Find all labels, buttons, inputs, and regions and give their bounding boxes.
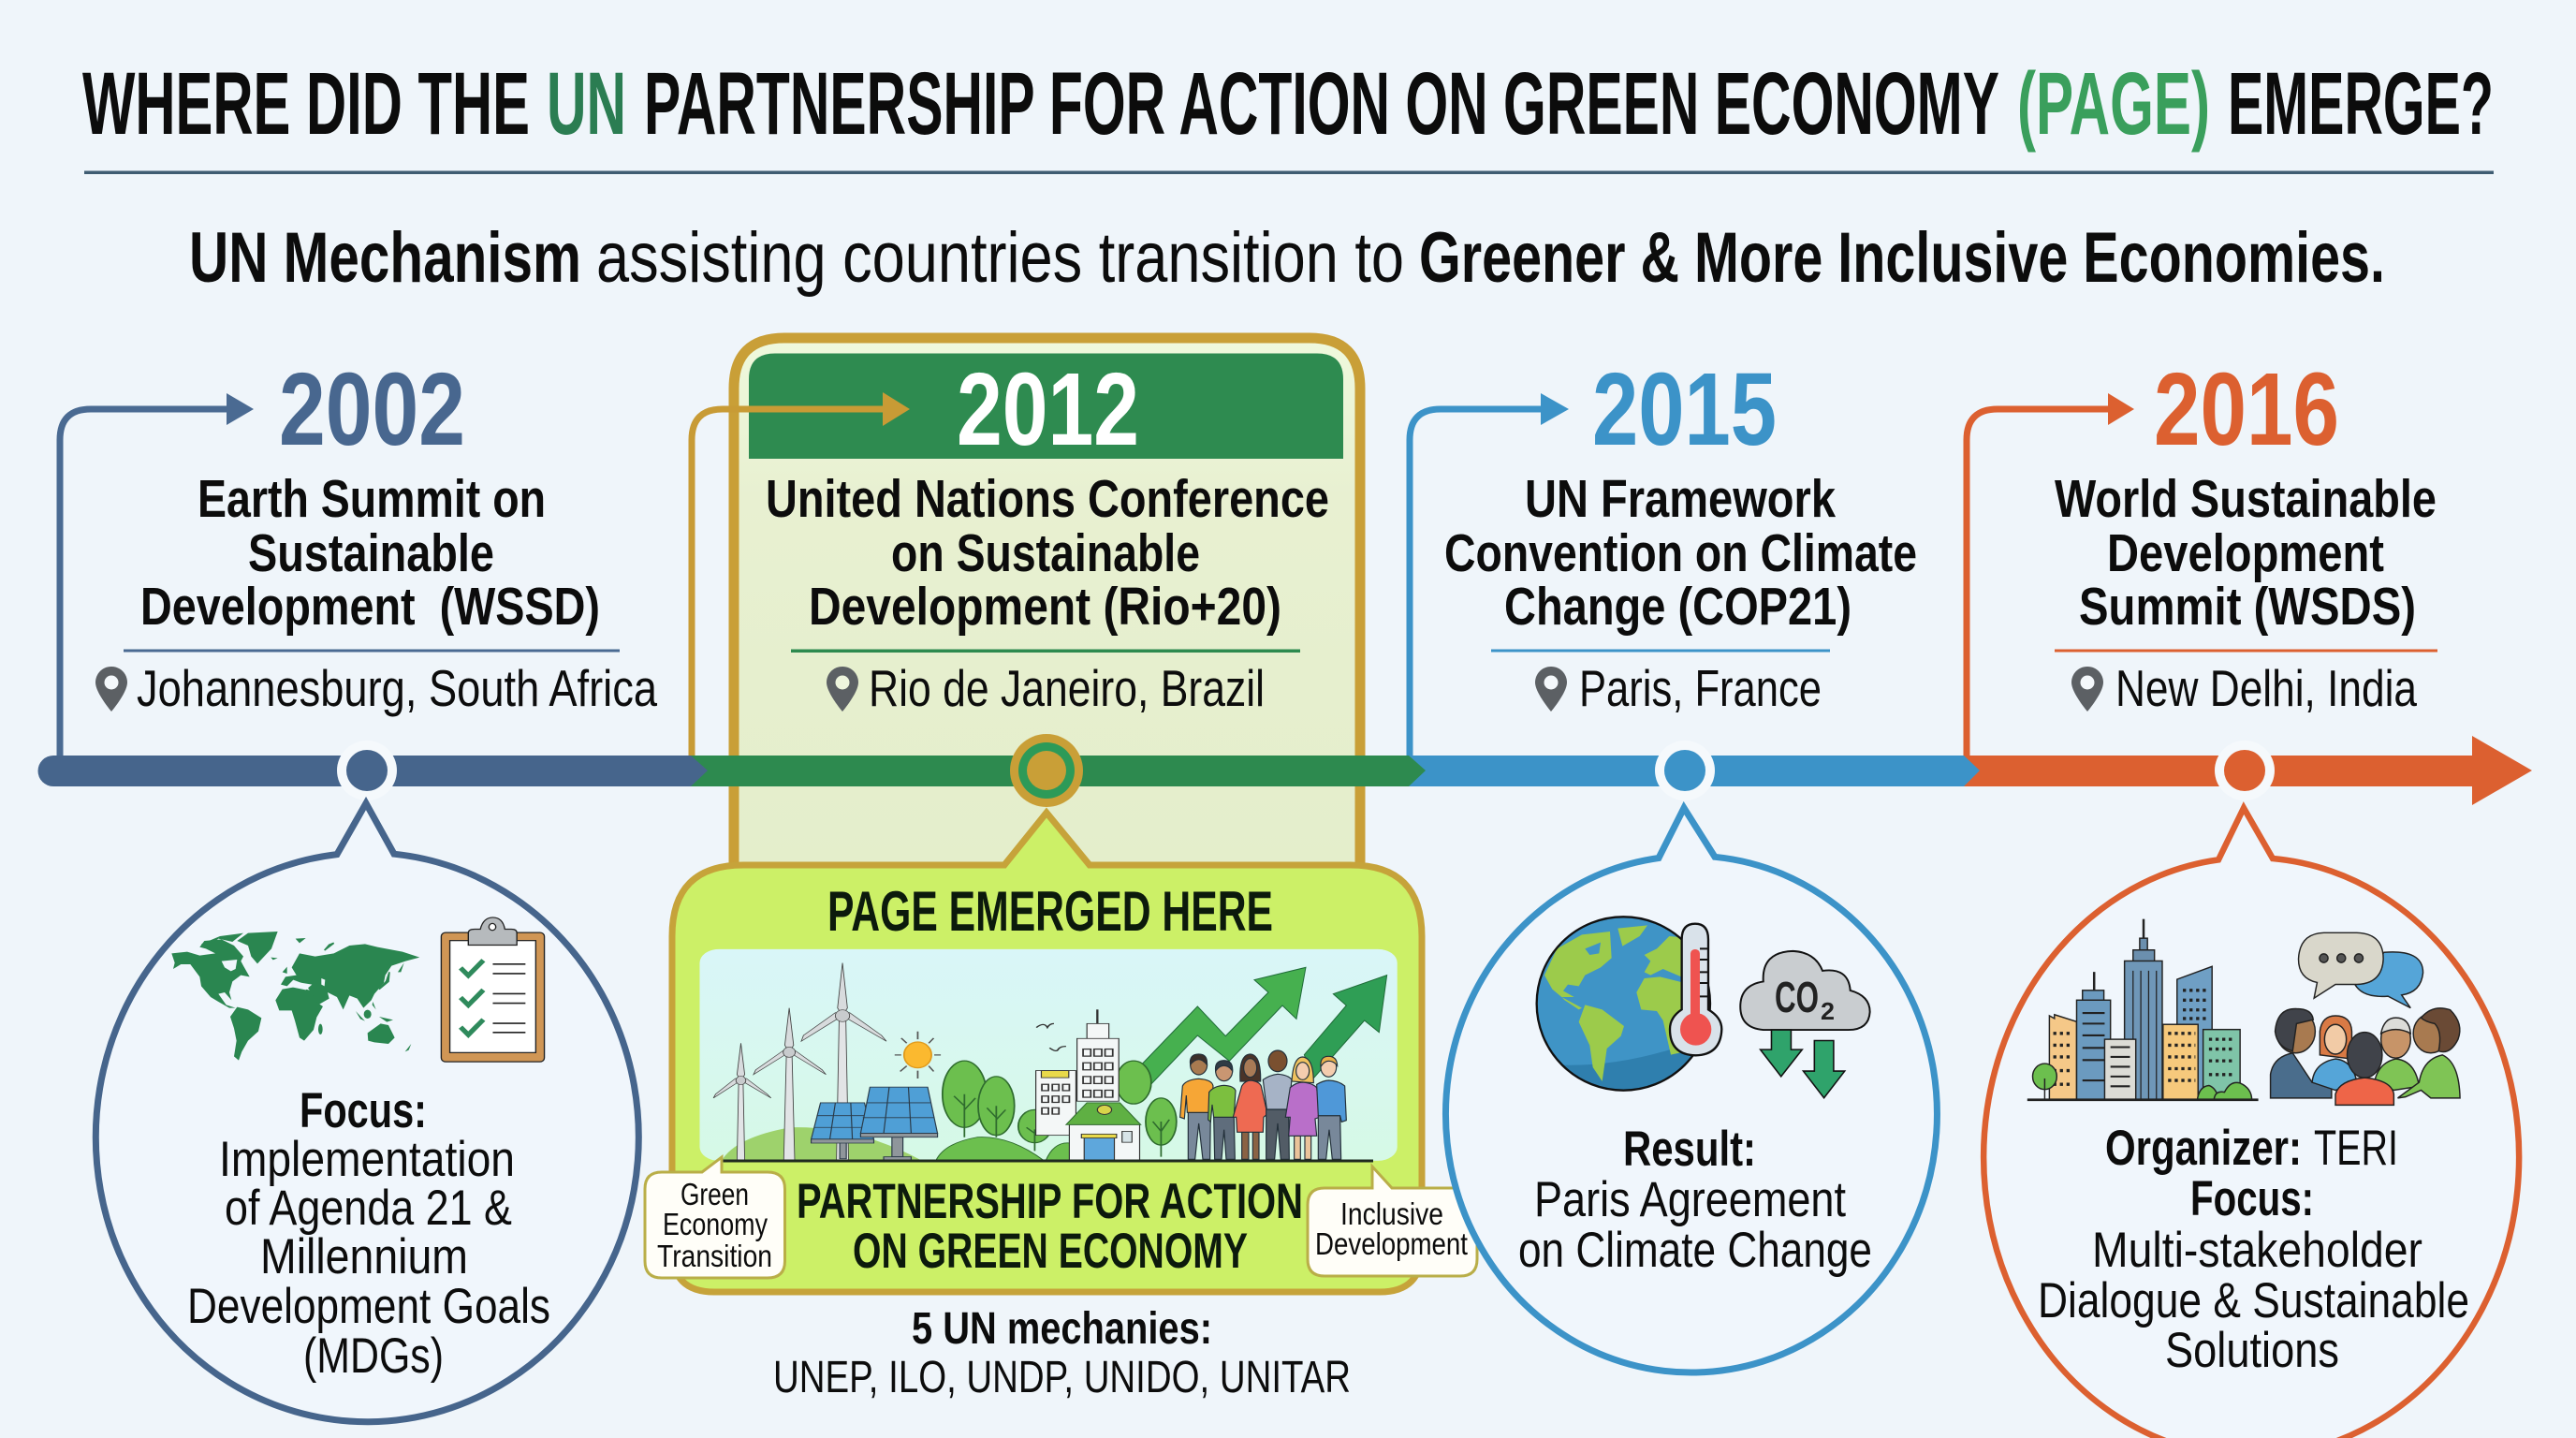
organizer text 2016 [2038,1121,2469,1378]
panel: 2012 highlight frame [734,338,1360,866]
organizer text 2016: Dialogue & Sustainable [2038,1273,2469,1328]
event name 2016 [2055,469,2437,637]
focus text 2002: Development Goals [187,1279,550,1334]
arrow: 2015 connector [1410,393,1569,758]
icon: stakeholder dialogue [2271,932,2460,1105]
organizer text 2016: Multi-stakeholder [2092,1223,2422,1278]
illustration: green economy scene [699,949,1398,1163]
organizer text 2016: Organizer: [2105,1121,2302,1176]
event name 2012: United Nations Conference [766,469,1329,529]
node: 2002 [337,741,397,800]
event: 2015 [1444,352,1917,717]
focus text 2002: Implementation [219,1132,515,1187]
event: 2002 [95,352,657,717]
year 2016: 2016 [2154,352,2339,467]
event name 2002 [140,469,600,637]
location 2015: Paris, France [1579,659,1822,717]
title: (PAGE) [2017,54,2210,154]
location 2002: Johannesburg, South Africa [137,659,657,717]
arrow: 2016 connector [1967,393,2134,758]
focus text 2002: Focus: [300,1083,427,1138]
arrow: 2002 connector [60,393,254,758]
callout: inclusive development [1308,1167,1477,1276]
focus text 2002: Millennium [260,1229,468,1284]
event name 2016: Summit (WSDS) [2079,577,2416,637]
event name 2012: on Sustainable [891,523,1200,583]
timeline bar [37,736,2532,805]
event name 2002: Sustainable [248,523,494,583]
subtitle: assisting countries transition to [596,218,1404,298]
location 2016: New Delhi, India [2115,659,2417,717]
year 2012: 2012 [957,352,1139,467]
event name 2015: Convention on Climate [1444,523,1917,583]
location 2015 [1535,659,1822,717]
panel name text: PARTNERSHIP FOR ACTION [797,1174,1303,1229]
focus text 2002: (MDGs) [303,1328,444,1384]
event name 2012 [766,469,1329,637]
icon: globe and thermometer [1537,917,1721,1095]
panel: 2015 result bubble [1445,808,1937,1372]
callout: green economy transition [645,1157,784,1278]
focus text 2002: of Agenda 21 & [225,1181,512,1236]
event: 2012 [766,352,1329,717]
year 2002: 2002 [279,352,465,467]
subtitle: UN Mechanism [189,218,581,298]
event name 2015: UN Framework [1525,469,1836,529]
year 2015: 2015 [1592,352,1777,467]
title: WHERE DID THE [82,54,530,154]
callout: inclusive development: Inclusive [1340,1196,1443,1231]
panel: 2002 focus bubble [95,803,638,1422]
callout: green economy transition: Green [681,1177,749,1211]
subtitle [189,218,2385,298]
organizer text 2016: TERI [2314,1121,2398,1176]
event name 2016: Development [2107,523,2384,583]
result text 2015: Paris Agreement [1534,1172,1846,1227]
icon: CO2 cloud with down arrows [1740,951,1870,1098]
icon: checklist clipboard [441,917,545,1062]
callout: inclusive development: Development [1315,1226,1468,1261]
result text 2015: Result: [1623,1122,1756,1177]
icon: CO2 cloud with down arrows: 2 [1821,997,1835,1025]
UN mechanisms note: UNEP, ILO, UNDP, UNIDO, UNITAR [773,1353,1351,1402]
focus text 2002 [187,1083,550,1384]
event name 2015: Change (COP21) [1504,577,1852,637]
event name 2015 [1444,469,1917,637]
UN mechanisms note [773,1304,1351,1402]
event: 2016 [2055,352,2437,717]
event name 2002: Development (WSSD) [140,577,600,637]
event name 2012: Development (Rio+20) [809,577,1281,637]
result text 2015: on Climate Change [1518,1223,1872,1278]
event name 2002: Earth Summit on [198,469,546,529]
callout: green economy transition: Economy [663,1207,768,1241]
UN mechanisms note: 5 UN mechanies: [912,1304,1212,1354]
node: 2016 [2215,741,2275,800]
result text 2015 [1518,1122,1872,1278]
event name 2016: World Sustainable [2055,469,2437,529]
panel: PAGE emerged here [645,813,1477,1292]
icon: city skyline [2028,919,2258,1100]
arrow: 2012 connector [692,392,910,758]
panel name text: ON GREEN ECONOMY [853,1224,1248,1279]
icon: CO2 cloud with down arrows: CO [1775,973,1819,1021]
icon: world map [171,932,419,1061]
organizer text 2016: Focus: [2190,1171,2314,1226]
panel name text [797,1174,1303,1279]
node: 2012 [1010,734,1083,807]
panel: 2016 organizer bubble [1983,808,2519,1438]
node: 2015 [1655,741,1715,800]
organizer text 2016: Solutions [2165,1323,2339,1378]
title: UN [547,54,626,154]
panel heading: PAGE EMERGED HERE [827,880,1273,943]
callout: green economy transition: Transition [657,1239,772,1273]
location 2012: Rio de Janeiro, Brazil [869,659,1265,717]
